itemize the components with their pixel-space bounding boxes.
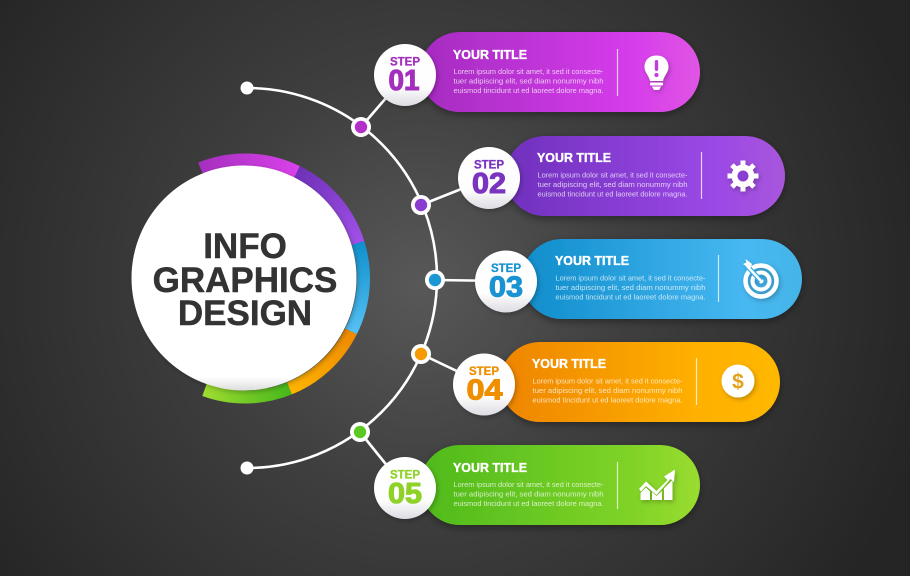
body 4: Lorem ipsum dolor sit amet, it sed it consecte- bbox=[532, 376, 683, 386]
badge 2: STEP bbox=[474, 160, 504, 172]
hub title: DESIGN bbox=[178, 294, 312, 333]
badge 2: 02 bbox=[472, 168, 506, 200]
segmented colour ring bbox=[201, 160, 363, 397]
badge 1: 01 bbox=[388, 65, 420, 97]
icon: growth chart bbox=[639, 470, 675, 500]
pill 1 bbox=[420, 32, 700, 112]
badge 5: STEP bbox=[390, 470, 420, 482]
icon: dollar coin bbox=[722, 364, 754, 398]
pill 4 bbox=[500, 342, 780, 422]
icon: dollar coin: $ bbox=[732, 370, 744, 394]
body 2 bbox=[538, 170, 688, 198]
icon: gear bbox=[728, 160, 758, 192]
body 3 bbox=[556, 274, 706, 302]
body 2: euismod tincidunt ut ed laoreet dolore magna. bbox=[538, 190, 688, 198]
node 1 bbox=[351, 117, 371, 137]
body 3: euismod tincidunt ut ed laoreet dolore magna. bbox=[556, 292, 706, 302]
body 1: euismod tincidunt ut ed laoreet dolore magna. bbox=[454, 86, 604, 95]
divider 5 bbox=[616, 462, 618, 509]
divider 2 bbox=[700, 152, 702, 199]
connector 4 bbox=[421, 354, 484, 384]
pill 3 bbox=[522, 239, 802, 319]
central hub bbox=[132, 160, 363, 397]
body 4: tuer adipiscing elit, sed diam nonummy nibh bbox=[532, 386, 682, 395]
body 5 bbox=[454, 480, 604, 508]
hub title: GRAPHICS bbox=[153, 261, 337, 300]
node 2 bbox=[411, 195, 431, 215]
arc start dot bbox=[240, 82, 254, 94]
hub title bbox=[153, 227, 337, 333]
white hub circle bbox=[132, 166, 356, 390]
badge 4 bbox=[453, 354, 515, 416]
node 4 bbox=[411, 344, 431, 364]
pill 2 bbox=[505, 136, 785, 216]
body 1: Lorem ipsum dolor sit amet, it sed it consecte- bbox=[454, 67, 604, 76]
node 3 bbox=[425, 270, 445, 290]
badge 4: 04 bbox=[466, 374, 502, 406]
title 5: YOUR TITLE bbox=[453, 461, 527, 475]
badge 3: STEP bbox=[491, 263, 521, 275]
body 3: Lorem ipsum dolor sit amet, it sed it consecte- bbox=[556, 274, 706, 282]
badge 2 bbox=[458, 147, 520, 209]
divider 3 bbox=[718, 255, 720, 302]
timeline arc bbox=[247, 88, 437, 468]
connector 2 bbox=[421, 178, 489, 205]
badge 5 bbox=[374, 457, 436, 519]
badge 3 bbox=[475, 250, 537, 312]
badge 5: 05 bbox=[388, 478, 422, 510]
icon: target bbox=[743, 259, 776, 296]
node 5 bbox=[350, 422, 370, 442]
badge 1 bbox=[374, 44, 436, 106]
body 2: Lorem ipsum dolor sit amet, it sed it consecte- bbox=[538, 170, 688, 180]
body 1: tuer adipiscing elit, sed diam nonummy nibh bbox=[454, 76, 604, 86]
divider 4 bbox=[696, 358, 698, 405]
icon: light bulb bbox=[644, 56, 668, 90]
connector 3 bbox=[435, 280, 506, 281]
body 1 bbox=[454, 67, 604, 95]
body 4: euismod tincidunt ut ed laoreet dolore magna. bbox=[532, 396, 682, 404]
arc end dot bbox=[240, 462, 254, 474]
title 2: YOUR TITLE bbox=[537, 151, 611, 165]
step 3 bbox=[425, 239, 802, 319]
body 4 bbox=[532, 376, 683, 404]
connector 1 bbox=[361, 76, 405, 127]
hub title: INFO bbox=[203, 227, 287, 266]
badge 4: STEP bbox=[469, 366, 499, 378]
step 2 bbox=[411, 136, 785, 216]
pill 5 bbox=[420, 445, 700, 525]
body 3: tuer adipiscing elit, sed diam nonummy nibh bbox=[556, 283, 706, 292]
body 5: Lorem ipsum dolor sit amet, it sed it consecte- bbox=[454, 480, 604, 489]
step 1 bbox=[351, 32, 700, 137]
connector 5 bbox=[360, 432, 405, 488]
step 4 bbox=[411, 342, 780, 422]
body 5: euismod tincidunt ut ed laoreet dolore magna. bbox=[454, 499, 604, 508]
badge 1: STEP bbox=[390, 56, 420, 68]
badge 3: 03 bbox=[489, 272, 523, 304]
title 1: YOUR TITLE bbox=[453, 48, 527, 62]
body 2: tuer adipiscing elit, sed diam nonummy nibh bbox=[538, 180, 688, 189]
body 5: tuer adipiscing elit, sed diam nonummy nibh bbox=[454, 490, 604, 498]
divider 1 bbox=[616, 49, 618, 96]
title 4: YOUR TITLE bbox=[532, 357, 606, 371]
title 3: YOUR TITLE bbox=[555, 254, 629, 268]
step 5 bbox=[350, 422, 700, 525]
